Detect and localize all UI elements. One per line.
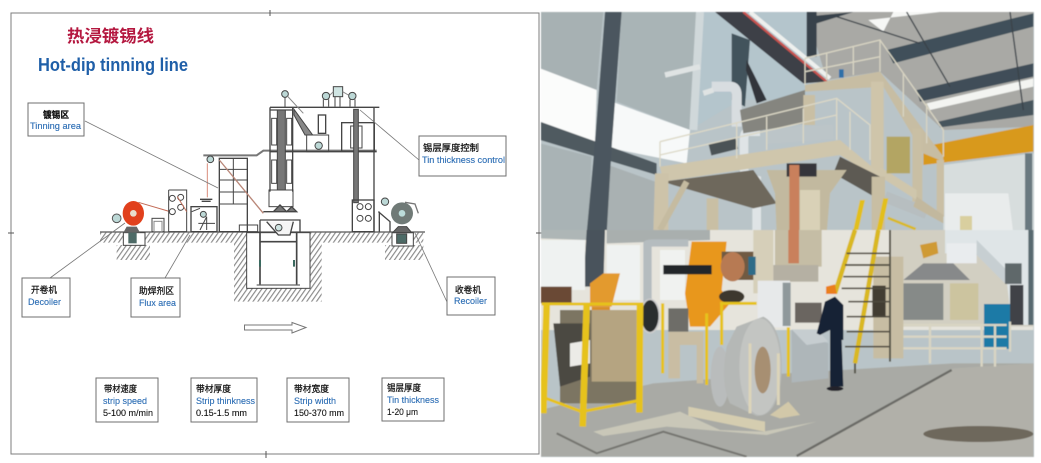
spec box: strip width [287, 378, 349, 422]
spec box: strip speed [96, 378, 158, 422]
photo: upper hall [540, 12, 1033, 233]
spec box: tin thickness [382, 378, 444, 421]
left machinery [540, 287, 572, 303]
callout: flux area: Flux area [139, 298, 177, 309]
orange machine [685, 242, 730, 327]
hopper and strip [767, 170, 847, 233]
lower platform [660, 140, 880, 182]
callout: flux area [131, 278, 180, 317]
callout: tin thickness control [419, 136, 506, 176]
callout: recoiler: 收卷机 [455, 284, 481, 295]
upper platform [805, 72, 943, 162]
pipes [712, 87, 737, 127]
callout: tinning area [28, 103, 84, 136]
spec box: tin thickness: 1-20 μm [387, 407, 418, 418]
callout: flux area: 助焊剂区 [139, 285, 174, 296]
callout: decoiler: Decoiler [28, 297, 61, 308]
structure behind [753, 230, 773, 293]
flux area equipment [152, 151, 377, 232]
panel: factory photo [540, 12, 1034, 457]
callout: tin thickness control: 锡层厚度控制 [423, 142, 479, 153]
callout: tin thickness control: Tin thickness control [422, 155, 505, 166]
title english: Hot-dip tinning line [38, 55, 188, 75]
spec box: strip width: 带材宽度 [294, 383, 329, 394]
spec box: strip speed: 带材速度 [104, 383, 137, 394]
arrow: strip direction [244, 322, 306, 333]
callout: recoiler [447, 277, 495, 315]
mid stand [668, 332, 703, 383]
tin pot [239, 205, 300, 285]
spec box: strip thickness [191, 378, 257, 422]
callout: recoiler: Recoiler [454, 296, 487, 307]
spec box: strip speed: strip speed [103, 396, 147, 407]
railings [805, 40, 943, 157]
spec box: strip thickness: 带材厚度 [196, 383, 231, 394]
white cabinet [758, 281, 790, 327]
callout: decoiler [22, 278, 70, 317]
yellow fence [542, 303, 788, 412]
tinning tower [219, 87, 379, 232]
spec box: strip width: 150-370 mm [294, 408, 344, 419]
spec box: tin thickness: 锡层厚度 [387, 382, 421, 393]
worker [817, 284, 843, 391]
recoiler group [352, 198, 412, 243]
icon: recoiler grey coil [391, 202, 418, 224]
spec box: strip thickness: Strip thinkness [196, 396, 255, 407]
coil [710, 347, 727, 406]
ladder [835, 230, 878, 363]
ground hatching [100, 232, 425, 302]
callout: tinning area: Tinning area [30, 121, 82, 132]
rear right area [890, 230, 1033, 327]
control desk [792, 329, 828, 383]
spec box: strip width: Strip width [294, 396, 336, 407]
photo: lower hall [540, 230, 1033, 457]
leader lines [50, 110, 447, 302]
callout: decoiler: 开卷机 [31, 284, 57, 295]
spec box: strip speed: 5-100 m/min [103, 408, 153, 419]
spec box: strip thickness: 0.15-1.5 mm [196, 408, 247, 419]
callout: tinning area: 镀锡区 [43, 109, 69, 120]
panel: process diagram [8, 10, 542, 458]
spec box: tin thickness: Tin thickness [387, 395, 439, 406]
floor [540, 363, 1033, 457]
title chinese: 热浸镀锡线 [67, 26, 154, 46]
icon: decoiler red coil [112, 201, 170, 243]
machine line schematic [100, 87, 425, 302]
